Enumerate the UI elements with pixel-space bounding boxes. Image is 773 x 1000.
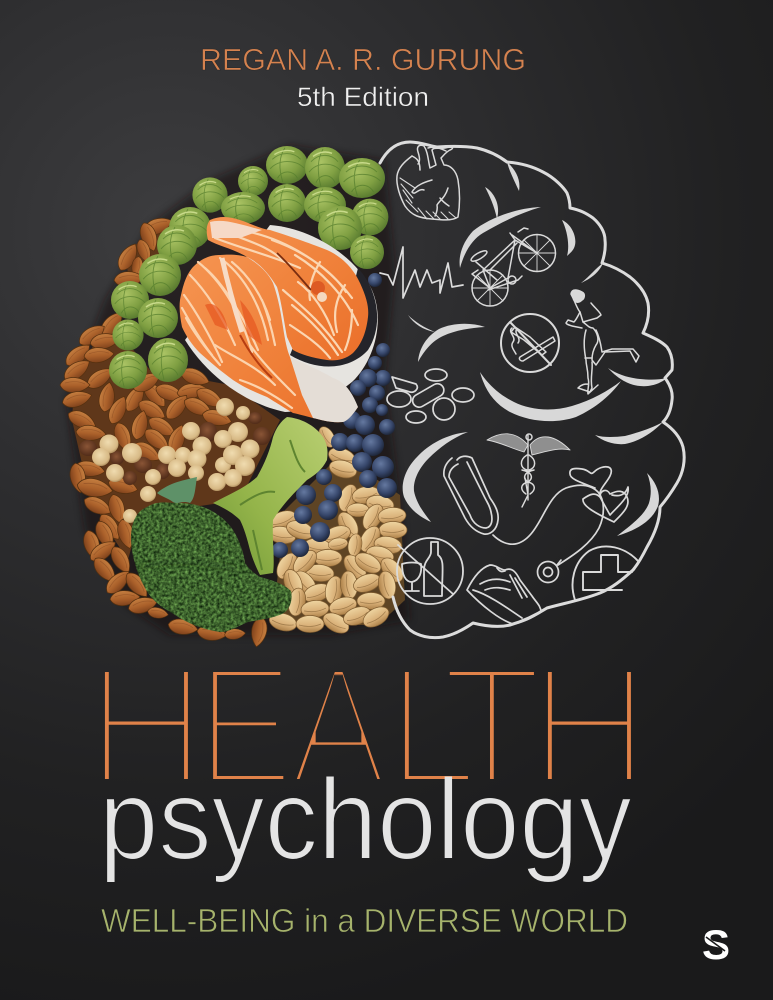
icon: pills: [387, 369, 474, 423]
icon: running shoe: [467, 565, 541, 624]
tagline: WELL-BEING in a DIVERSE WORLD: [101, 902, 628, 939]
publisher logo: S: [702, 921, 730, 968]
icon: bicycle: [470, 228, 556, 306]
chalk brain outline: [380, 142, 684, 638]
broccoli: [131, 417, 328, 632]
salmon skin: [290, 268, 377, 366]
main title: HEALTH: LTH: [385, 631, 651, 821]
outer outline: [380, 142, 684, 638]
icon: no alcohol: [397, 538, 463, 604]
broccoli stem: [213, 417, 328, 575]
salmon steaks: [180, 217, 377, 422]
pistachios: [267, 424, 408, 637]
icon: medical cross: [573, 546, 638, 600]
icon: caduceus: [487, 434, 570, 507]
salmon tail skin: [290, 357, 358, 422]
main title: HEALTH: [85, 630, 651, 821]
brussels sprouts: [109, 146, 388, 389]
food half of the brain: [60, 145, 410, 648]
lower salmon steak: [180, 255, 358, 422]
icon: hearts: [570, 467, 628, 522]
brain fold crescents: [403, 162, 667, 536]
almonds: [60, 214, 280, 648]
icon: heart: [397, 145, 460, 220]
icon: runner: [566, 290, 639, 394]
edition: 5th Edition: [297, 82, 429, 112]
main title: HEALTH: A: [289, 630, 388, 820]
upper salmon steak: [207, 217, 368, 360]
main title: HEALTH: E: [196, 630, 295, 820]
food shadow: [66, 145, 410, 635]
icon: heartbeat line: [380, 247, 463, 298]
broccoli florets: [131, 502, 292, 632]
subtitle: psychology: psychology: [99, 756, 632, 884]
author name: REGAN A. R. GURUNG: [200, 42, 526, 77]
main title: HEALTH: H: [85, 631, 208, 821]
icon: no smoking: [501, 314, 559, 372]
hazelnuts: [79, 398, 271, 523]
broccoli leaf: [157, 477, 197, 503]
plate: [185, 225, 378, 412]
icon: stethoscope: [444, 456, 603, 582]
blueberries: [272, 273, 397, 558]
